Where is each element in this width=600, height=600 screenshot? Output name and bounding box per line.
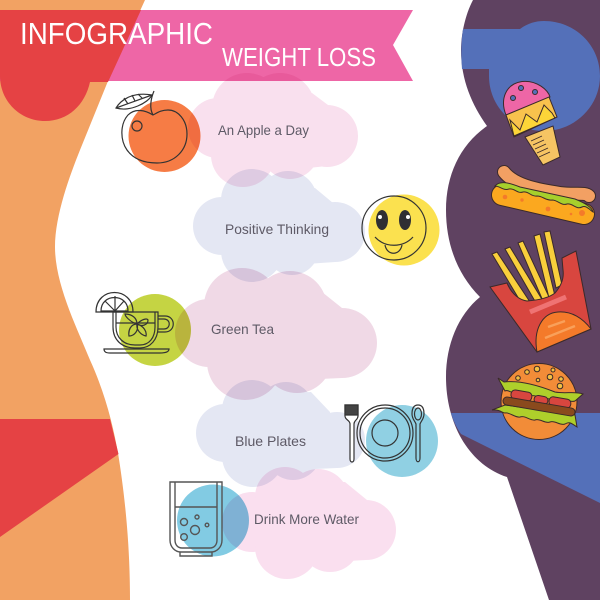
- red bikini bottom: [0, 419, 118, 537]
- blue bottom shape: [451, 413, 600, 503]
- body silhouette: left: [0, 0, 145, 600]
- title banner: [0, 10, 413, 121]
- label: blue plates: Blue Plates: [235, 433, 306, 449]
- icon: burger: [492, 364, 583, 440]
- icon: water glass: [170, 482, 249, 556]
- label: drink more water: Drink More Water: [254, 511, 359, 527]
- cloud: drink more water: [222, 467, 396, 579]
- cloud: green tea: [175, 268, 377, 400]
- title: infographic: INFOGRAPHIC: [20, 16, 213, 51]
- subtitle: weight loss: WEIGHT LOSS: [222, 42, 376, 72]
- cloud: apple: [188, 73, 358, 187]
- cloud: positive thinking: [193, 169, 365, 282]
- icon: french fries: [490, 231, 591, 352]
- cloud: blue plates: [196, 380, 365, 487]
- icon: smiley: [362, 194, 440, 266]
- label: positive thinking: Positive Thinking: [225, 221, 329, 237]
- icon: plate and cutlery: [345, 405, 438, 477]
- icon: apple: [116, 91, 200, 172]
- label: green tea: Green Tea: [211, 321, 274, 337]
- blue top shape: [461, 21, 600, 131]
- icon: hot dog: [495, 172, 593, 216]
- label: an apple a day: An Apple a Day: [218, 122, 309, 138]
- icon: ice cream: [504, 81, 560, 165]
- icon: tea cup: [96, 292, 191, 366]
- body silhouette: right: [446, 0, 600, 600]
